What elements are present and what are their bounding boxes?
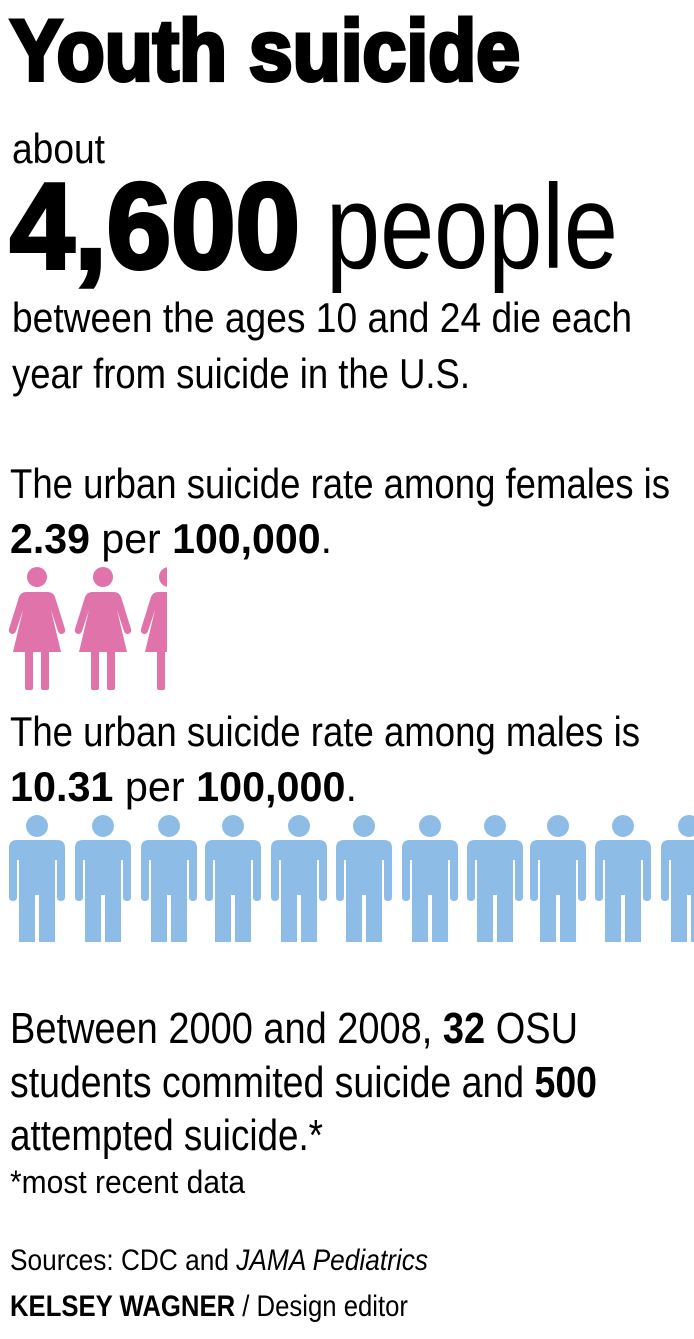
stat: 4,600 people: about [12,125,105,172]
OSU stat text: Between 2000 and 2008, 32 OSU [10,1004,578,1053]
credits: Sources: CDC and JAMA Pediatrics [10,1244,428,1277]
female rate text [10,460,670,562]
stat: 4,600 people: between the ages 10 and 24 die each [12,294,632,341]
stat: 4,600 people: people [326,160,618,294]
male rate text [10,708,640,810]
stat: 4,600 people [10,125,632,397]
OSU stat text [10,1004,597,1200]
male rate text: 10.31 per 100,000. [10,763,357,810]
credits [10,1244,428,1323]
female rate text: 2.39 per 100,000. [10,515,332,562]
stat: 4,600 people: year from suicide in the U.S. [12,350,470,397]
stat: 4,600 people: 4,600 [10,158,300,294]
title: Youth suicide [10,3,520,99]
credits: KELSEY WAGNER / Design editor [10,1290,408,1323]
OSU stat text: *most recent data [10,1164,245,1200]
OSU stat text: students commited suicide and 500 [10,1058,597,1107]
icon row: male pictograms [9,815,694,942]
icon row: female pictograms [9,567,197,690]
OSU stat text: attempted suicide.* [10,1111,323,1160]
